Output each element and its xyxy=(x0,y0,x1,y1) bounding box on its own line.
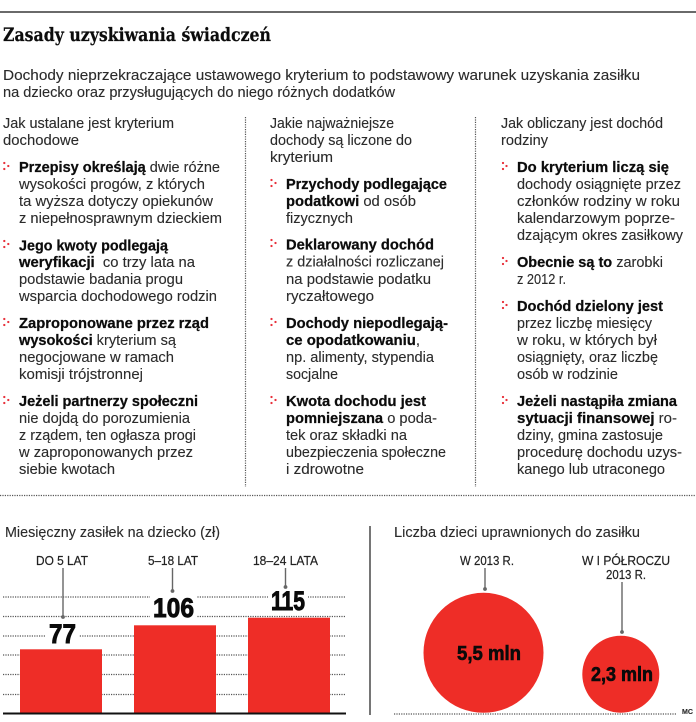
item: do kryterium: członków rodziny w roku xyxy=(517,193,680,210)
column 2 heading: kryterium xyxy=(270,149,333,166)
item: dochody niepodlegające: Dochody niepodlegają- xyxy=(286,315,448,332)
item: obecnie: z 2012 r. xyxy=(517,271,566,288)
item: przychody: Przychody podlegające xyxy=(286,176,447,193)
item: przychody: fizycznych xyxy=(286,210,353,227)
column 3 heading xyxy=(501,115,663,149)
bar: 18-24 lata: 18–24 LATA xyxy=(253,554,319,568)
chart heading: Liczba dzieci uprawnionych do zasiłku xyxy=(394,524,640,541)
item: przepisy xyxy=(4,159,222,227)
item: rząd: komisji trójstronnej xyxy=(19,366,143,383)
intro text: na dziecko oraz przysługujących do niego różnych dodatków xyxy=(3,84,395,101)
bar: 18-24 lata: 115 xyxy=(271,586,305,616)
circle: 2013: W 2013 R. xyxy=(460,554,514,568)
title: Zasady uzyskiwania świadczeń xyxy=(3,25,271,46)
item: zmiana sytuacji xyxy=(503,393,682,478)
item: rząd xyxy=(4,315,209,383)
panel: column 2 xyxy=(270,115,448,478)
item: partnerzy: w zaproponowanych przez xyxy=(18,444,193,461)
bar: do 5 lat: DO 5 LAT xyxy=(36,554,88,568)
item: kwota dochodu xyxy=(272,393,446,478)
item: do kryterium: kalendarzowym poprze- xyxy=(517,210,675,227)
item: do kryterium xyxy=(503,159,683,244)
item: obecnie xyxy=(503,254,663,288)
item: partnerzy xyxy=(4,393,198,478)
item: dochody niepodlegające: ce opodatkowaniu, xyxy=(286,332,420,349)
item: partnerzy: nie dojdą do porozumienia xyxy=(19,410,191,427)
item: dochód dzielony: osób w rodzinie xyxy=(517,366,618,383)
item: dochód dzielony: osiągnięty, oraz liczbę xyxy=(517,349,658,366)
item: deklarowany dochód: ryczałtowego xyxy=(286,288,374,305)
item: przepisy: wysokości progów, z których xyxy=(18,176,205,193)
item: kwoty: podstawie badania progu xyxy=(19,271,183,288)
bar: 18-24 lata xyxy=(248,554,330,713)
panel: column 1 xyxy=(3,115,222,478)
item: zmiana sytuacji: sytuacji finansowej ro- xyxy=(517,410,677,427)
item: dochód dzielony: w roku, w których był xyxy=(516,332,658,349)
item: kwota dochodu: tek oraz składki na xyxy=(286,427,408,444)
item: zmiana sytuacji: kanego lub utraconego xyxy=(517,461,665,478)
bar: do 5 lat: 77 xyxy=(49,619,76,649)
item: kwota dochodu: ubezpieczenia społeczne xyxy=(286,444,446,461)
item: przepisy: ta wyższa dotyczy opiekunów xyxy=(19,193,213,210)
intro text xyxy=(3,67,640,101)
circle: first half 2013 xyxy=(582,553,670,713)
column 2 heading: dochody są liczone do xyxy=(270,132,412,149)
column 3 heading: Jak obliczany jest dochód xyxy=(501,115,663,132)
column 3 heading: rodziny xyxy=(501,132,548,149)
item: rząd: negocjowane w ramach xyxy=(19,349,174,366)
circle: 2013 xyxy=(424,554,544,713)
item: kwoty xyxy=(4,238,217,305)
item: partnerzy: Jeżeli partnerzy społeczni xyxy=(19,393,198,410)
item: dochody niepodlegające: socjalne xyxy=(286,366,338,383)
bar: 5-18 lat: 106 xyxy=(153,593,194,623)
item: dochód dzielony: przez liczbę miesięcy xyxy=(517,315,652,332)
item: przepisy: Przepisy określają dwie różne xyxy=(19,159,220,176)
item: kwota dochodu: pomniejszana o poda- xyxy=(286,410,437,427)
item: przychody: podatkowi od osób xyxy=(286,193,416,210)
item: deklarowany dochód: z działalności rozliczanej xyxy=(286,254,444,270)
bar: 5-18 lat xyxy=(134,554,216,713)
item: partnerzy: z rządem, ten ogłasza progi xyxy=(19,427,196,444)
item: dochody niepodlegające: np. alimenty, stypendia xyxy=(286,349,435,366)
circle chart: eligible children xyxy=(394,524,693,716)
item: partnerzy: siebie kwotach xyxy=(19,461,115,478)
item: zmiana sytuacji: dziny, gmina zastosuje xyxy=(517,427,663,444)
bar: 5-18 lat: 5–18 LAT xyxy=(148,554,198,568)
column 1 heading: dochodowe xyxy=(3,132,79,149)
item: przepisy: z niepełnosprawnym dzieckiem xyxy=(19,210,222,227)
column 2 heading: Jakie najważniejsze xyxy=(270,115,394,132)
column 2 heading xyxy=(270,115,412,166)
bar chart: monthly benefit xyxy=(3,524,346,714)
item: kwoty: wsparcia dochodowego rodzin xyxy=(18,288,217,305)
item: deklarowany dochód: Deklarowany dochód xyxy=(286,236,434,254)
bar: do 5 lat xyxy=(20,554,102,713)
panel: column 3 xyxy=(501,115,683,478)
item: zmiana sytuacji: procedurę dochodu uzys- xyxy=(517,444,682,461)
item: dochód dzielony xyxy=(503,298,663,383)
item: dochód dzielony: Dochód dzielony jest xyxy=(517,298,663,315)
chart heading: Miesięczny zasiłek na dziecko (zł) xyxy=(5,524,220,541)
circle: first half 2013: 2013 R. xyxy=(606,568,646,582)
item: kwota dochodu: Kwota dochodu jest xyxy=(286,393,426,410)
item: dochody niepodlegające xyxy=(272,315,448,383)
item: do kryterium: Do kryterium liczą się xyxy=(517,159,669,176)
column 1 heading: Jak ustalane jest kryterium xyxy=(3,115,174,132)
item: do kryterium: dzającym okres zasiłkowy xyxy=(517,227,683,244)
circle: first half 2013: W I PÓŁROCZU xyxy=(582,553,670,568)
item: rząd: wysokości kryterium są xyxy=(18,332,177,349)
item: deklarowany dochód: na podstawie podatku xyxy=(286,271,431,288)
author credit: MC xyxy=(682,709,693,716)
item: przychody xyxy=(272,176,447,227)
item: do kryterium: dochody osiągnięte przez xyxy=(517,176,681,193)
item: kwota dochodu: i zdrowotne xyxy=(286,461,364,478)
circle: first half 2013: 2,3 mln xyxy=(591,664,653,686)
column 1 heading xyxy=(3,115,174,149)
circle: 2013: 5,5 mln xyxy=(457,643,521,665)
item: rząd: Zaproponowane przez rząd xyxy=(19,315,209,332)
item: kwoty: weryfikacji co trzy lata na xyxy=(18,254,196,271)
item: deklarowany dochód xyxy=(272,236,444,305)
item: zmiana sytuacji: Jeżeli nastąpiła zmiana xyxy=(517,393,678,410)
intro text: Dochody nieprzekraczające ustawowego kryterium to podstawowy warunek uzyskania zasiłku xyxy=(3,67,640,84)
item: obecnie: Obecnie są to zarobki xyxy=(517,254,663,271)
item: kwoty: Jego kwoty podlegają xyxy=(19,238,169,254)
